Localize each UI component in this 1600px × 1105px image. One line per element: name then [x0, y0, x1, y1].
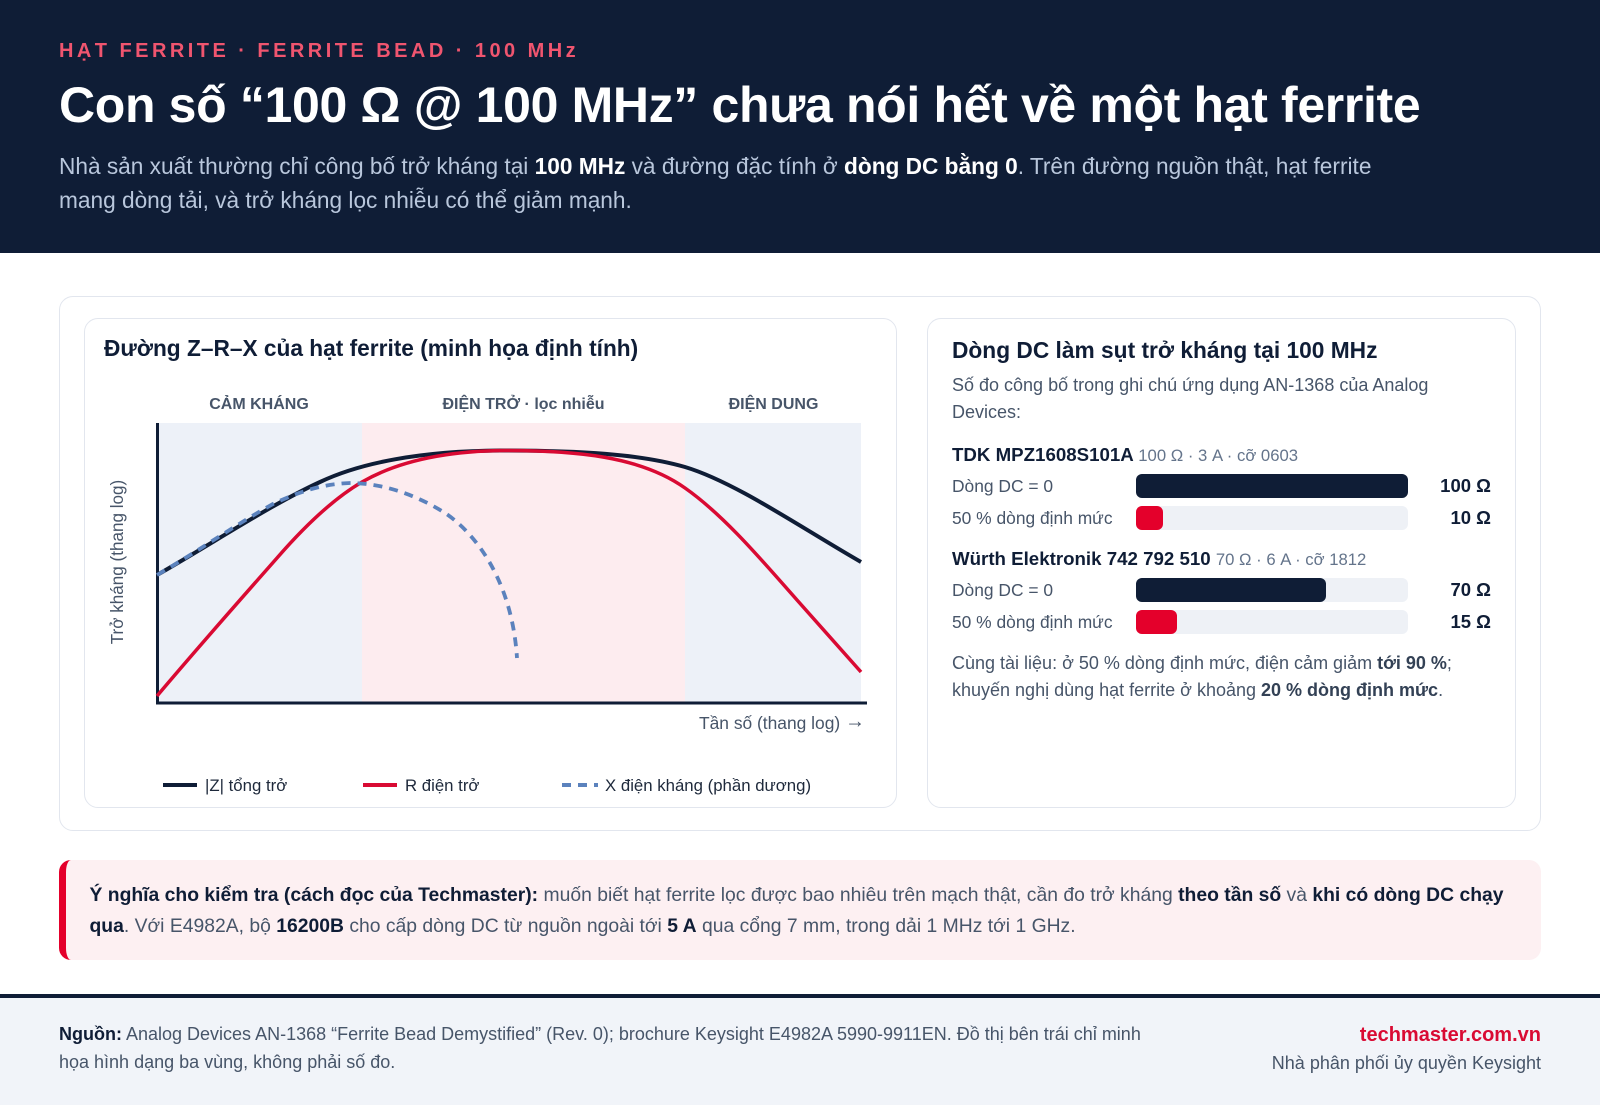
curve: X dashed — [157, 483, 517, 658]
note: Cùng tài liệu: ở 50 % dòng định mức, điện cảm giảm tới 90 %; — [952, 653, 1452, 673]
chart title: Đường Z–R–X của hạt ferrite (minh họa định tính) — [104, 335, 638, 361]
outer panel — [59, 296, 1541, 831]
source: họa hình dạng ba vùng, không phải số đo. — [59, 1052, 395, 1072]
zone label: inductive: CẢM KHÁNG — [209, 394, 309, 413]
footer — [0, 994, 1600, 1105]
value: 70 Ω — [1450, 579, 1491, 600]
part: TDK: TDK MPZ1608S101A 100 Ω · 3 A · cỡ 0603 — [952, 444, 1298, 465]
note — [952, 653, 1452, 700]
callout text: qua. Với E4982A, bộ 16200B cho cấp dòng DC từ nguồn ngoài tới 5 A qua cổng 7 mm, trong dải 1 MHz tới 1 GHz. — [90, 916, 1076, 937]
y axis — [156, 423, 159, 704]
intro text — [59, 153, 1371, 213]
value: 15 Ω — [1450, 611, 1491, 632]
region: inductive — [157, 423, 362, 703]
row label: 50 % dòng định mức — [952, 508, 1113, 528]
value: 100 Ω — [1440, 475, 1491, 496]
row label: Dòng DC = 0 — [952, 580, 1053, 600]
row label: Dòng DC = 0 — [952, 476, 1053, 496]
intro text: Nhà sản xuất thường chỉ công bố trở kháng tại 100 MHz và đường đặc tính ở dòng DC bằng 0. Trên đường nguồn thật, hạt ferrite — [59, 153, 1371, 179]
title: Con số “100 Ω @ 100 MHz” chưa nói hết về một hạt ferrite — [59, 77, 1420, 133]
source — [59, 1024, 1141, 1072]
panel: DC bias — [927, 318, 1516, 808]
x axis label: → — [845, 710, 865, 732]
row label: 50 % dòng định mức — [952, 612, 1113, 632]
brand: techmaster.com.vn — [1360, 1024, 1541, 1046]
curve: Z — [157, 450, 861, 575]
bar: TDK 50% — [1136, 506, 1408, 530]
zone label: resistive: ĐIỆN TRỞ · lọc nhiễu — [442, 394, 605, 413]
panel title: Dòng DC làm sụt trở kháng tại 100 MHz — [952, 337, 1377, 363]
region: capacitive — [685, 423, 861, 703]
y axis label: Trở kháng (thang log) — [108, 480, 127, 644]
curve: R — [157, 450, 861, 696]
legend: R — [363, 776, 479, 795]
legend: Z — [163, 776, 287, 795]
callout — [59, 860, 1541, 960]
callout text: Ý nghĩa cho kiểm tra (cách đọc của Techmaster): muốn biết hạt ferrite lọc được bao nhiêu trên mạch thật, cần đo trở kháng theo tần số và khi có dòng DC chạy — [90, 885, 1504, 906]
intro text: mang dòng tải, và trở kháng lọc nhiễu có thể giảm mạnh. — [59, 187, 632, 213]
brand note: Nhà phân phối ủy quyền Keysight — [1272, 1053, 1541, 1073]
panel subtitle: Devices: — [952, 402, 1021, 422]
part: Wurth: Würth Elektronik 742 792 510 70 Ω · 6 A · cỡ 1812 — [952, 548, 1366, 569]
x axis — [156, 702, 867, 704]
legend: R: R điện trở — [405, 776, 479, 795]
panel subtitle — [952, 375, 1428, 422]
eyebrow: HẠT FERRITE · FERRITE BEAD · 100 MHz — [59, 40, 579, 62]
callout text — [90, 884, 1504, 937]
bar: Wurth 0 A — [1136, 578, 1408, 602]
legend: X: X điện kháng (phần dương) — [605, 776, 811, 795]
header band — [0, 0, 1600, 253]
source: Nguồn: Analog Devices AN-1368 “Ferrite Bead Demystified” (Rev. 0); brochure Keysight E4982A 5990-9911EN. Đồ thị bên trái chỉ minh — [59, 1024, 1141, 1044]
legend: Z: |Z| tổng trở — [205, 776, 287, 795]
panel subtitle: Số đo công bố trong ghi chú ứng dụng AN-1368 của Analog — [952, 375, 1428, 395]
region: resistive — [362, 423, 685, 703]
x axis label: Tần số (thang log) — [699, 713, 840, 733]
bar: Wurth 50% — [1136, 610, 1408, 634]
panel: Z-R-X chart — [84, 318, 897, 808]
value: 10 Ω — [1450, 507, 1491, 528]
bar: TDK 0 A — [1136, 474, 1408, 498]
note: khuyến nghị dùng hạt ferrite ở khoảng 20 % dòng định mức. — [952, 680, 1443, 700]
zone label: capacitive: ĐIỆN DUNG — [729, 394, 818, 413]
